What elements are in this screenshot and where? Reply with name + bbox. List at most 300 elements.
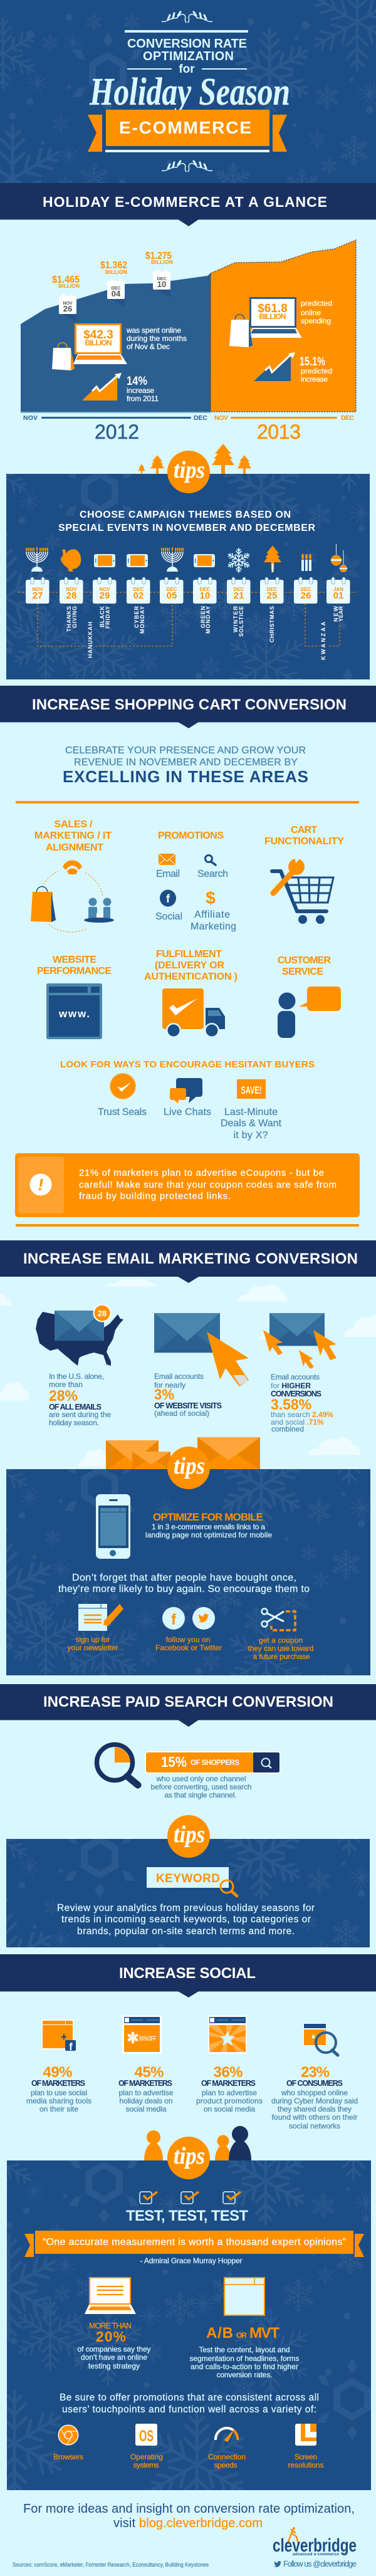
heading: choose campaign themes: SPECIAL EVENTS IN NOVEMBER AND DECEMBER — [58, 523, 315, 533]
stat: 49% of marketers — [26, 2019, 91, 2113]
icon: phone green monday — [194, 554, 215, 567]
stat: 36% of marketers: product promotions — [196, 2097, 263, 2105]
panel: keyword tip — [6, 1815, 370, 1947]
search bar: OF SHOPPERS — [191, 1759, 239, 1767]
text: predicted online spending: spending — [301, 317, 331, 325]
text: predicted online spending: predicted — [301, 299, 332, 308]
icon: phone cyber monday — [127, 554, 148, 567]
text: don't forget — [58, 1573, 310, 1594]
heading: MARKETING / IT — [34, 830, 112, 841]
heading: holiday e-commerce at a glance: HOLIDAY E-COMMERCE AT A GLANCE — [43, 194, 327, 210]
event labels: YEAR — [338, 605, 344, 622]
heading: increase social — [0, 1954, 376, 1997]
item: social follow: follow you on — [165, 1635, 211, 1644]
calendar: dec 10: DEC — [200, 587, 211, 592]
icon: turkey — [61, 549, 81, 572]
stat: 36% of marketers: OF MARKETERS — [201, 2079, 256, 2088]
icon: search — [206, 855, 216, 865]
stat: 15% of shoppers — [97, 1745, 280, 1799]
badge: tips: tips — [174, 457, 205, 483]
badge: tips: tips — [174, 2143, 205, 2169]
icon: delivery truck — [162, 988, 225, 1038]
area: 2012 — [21, 273, 211, 412]
heading: increase social: INCREASE SOCIAL — [119, 1965, 256, 1982]
text: optimize for mobile: 1 in 3 e-commerce emails links to a — [152, 1522, 265, 1531]
calendar: dec 26: 26 — [301, 590, 311, 601]
icon: page with magnifier — [303, 2023, 338, 2055]
label: affiliate marketing: Affiliate — [194, 909, 230, 920]
text: be sure to offer — [60, 2392, 319, 2415]
stat: 23% of consumers: they shared deals they — [278, 2105, 352, 2113]
peak day: dec 10: DEC — [157, 277, 166, 281]
item: newsletter — [68, 1604, 123, 1652]
text: was spent online: during the months — [127, 334, 187, 343]
title: CONVERSION RATE — [127, 37, 247, 51]
heading: ALIGNMENT — [46, 842, 103, 853]
stat: 15.1%: predicted — [301, 367, 332, 375]
heading: increase email marketing conversion: INCREASE EMAIL MARKETING CONVERSION — [23, 1250, 358, 1267]
panel: email tip — [6, 1447, 370, 1675]
stat: 15.1%: increase — [301, 375, 328, 384]
event labels: MONDAY — [139, 606, 145, 634]
search bar: 15% — [161, 1754, 187, 1770]
stat: 45% of marketers: plan to advertise — [119, 2088, 174, 2097]
calendar: dec 25 — [260, 577, 283, 604]
text: OF ALL EMAILS — [49, 1403, 102, 1411]
icon: alignment cycle — [31, 860, 114, 932]
item: connection speeds: speeds — [214, 2461, 237, 2469]
event labels: KWANZAA — [320, 622, 326, 660]
peak day: dec 04: BILLION — [105, 269, 127, 275]
text — [154, 1372, 222, 1418]
calendar: dec 05: 05 — [167, 590, 177, 601]
badge: tips — [167, 1447, 210, 1489]
item: a/b or mvt: segmentation of headlines, forms — [189, 2354, 300, 2363]
stat: 23% of consumers: who shopped online — [281, 2088, 348, 2097]
text: optimize for mobile: landing page not optimized for mobile — [145, 1531, 272, 1539]
item: live chats — [164, 1078, 211, 1118]
heading: increase paid search conversion: INCREASE PAID SEARCH CONVERSION — [43, 1694, 333, 1710]
text: In the U.S. alone, — [49, 1372, 104, 1381]
stat: 23% of consumers — [271, 2023, 358, 2130]
icon: holiday deal page: 50%OFF — [139, 2035, 156, 2043]
item: last-minute deals: Deals & Want — [221, 1118, 282, 1129]
stat: 49% of marketers: on their site — [39, 2105, 78, 2113]
area: fulfillment: (DELIVERY OR — [155, 960, 224, 971]
text: and social .71% — [271, 1418, 324, 1427]
panel: campaign themes tip — [6, 451, 370, 679]
icon: snowflake — [227, 548, 251, 572]
icon: growth arrow 2012 — [82, 373, 122, 401]
text — [49, 1372, 111, 1427]
icon: browser: www. — [58, 1008, 90, 1020]
text: as that single channel. — [164, 1791, 237, 1799]
icon: customer with speech bubble — [278, 987, 341, 1038]
icon: cart with wrench — [272, 856, 333, 924]
stat: 45% of marketers — [118, 2016, 174, 2113]
text: was spent online — [126, 326, 187, 351]
peak day: dec 04: $1.362 — [100, 260, 127, 271]
text: for HIGHER — [271, 1381, 311, 1390]
calendar: dec 05: DEC — [167, 587, 177, 592]
stat: 23% of consumers: OF CONSUMERS — [286, 2079, 343, 2088]
heading: choose campaign themes: CHOOSE CAMPAIGN THEMES BASED ON — [80, 510, 291, 520]
intro text: excelling in these areas: CELEBRATE YOUR PRESENCE AND GROW YOUR — [65, 745, 306, 756]
icon: growth arrow 2013 — [254, 352, 295, 381]
peak day: nov 26: BILLION — [58, 283, 80, 289]
event labels: CYBER — [133, 605, 140, 628]
item: connection speeds: Connection — [208, 2453, 246, 2461]
icon: checkboxes — [140, 2192, 241, 2204]
header panel — [0, 0, 376, 183]
badge: tips — [167, 451, 210, 493]
icon: bottom ornament — [162, 161, 212, 172]
item: 20% no testing strategy — [78, 2278, 150, 2370]
text: be sure to offer: users’ touchpoints and function well across a variety of: — [62, 2404, 316, 2415]
text: don't forget: Don’t forget that after people have bought once, — [72, 1573, 296, 1583]
heading: FUNCTIONALITY — [264, 836, 344, 847]
icon: envelope with cursors — [263, 1313, 337, 1369]
quote attribution: - Admiral Grace Murray Hopper — [140, 2256, 242, 2265]
callout: ecoupons warning: fraud by building protected links. — [79, 1191, 231, 1202]
area: customer service: CUSTOMER — [278, 955, 331, 966]
calendar: dec 02: DEC — [133, 587, 144, 592]
area: fulfillment — [144, 949, 238, 1038]
area: customer service — [278, 955, 341, 1038]
text: Email accounts — [154, 1372, 204, 1381]
event labels — [66, 605, 344, 660]
item: 20% no testing strategy: MORE THAN — [89, 2322, 132, 2330]
logo: cleverbridge — [273, 2527, 357, 2557]
area: promotions — [155, 830, 236, 932]
intro text: excelling in these areas: REVENUE IN NOVEMBER AND DECEMBER BY — [74, 757, 298, 768]
icon: envelope with cursor — [154, 1313, 249, 1386]
calendar: nov 29: 29 — [100, 590, 110, 601]
item: screen resolutions: resolutions — [288, 2461, 323, 2469]
stat: 28% of emails — [36, 1304, 123, 1427]
timeline: 2013: 2013 — [257, 421, 301, 443]
item: newsletter: your newsletter — [68, 1643, 118, 1652]
stat: 45% of marketers: holiday deals on — [119, 2097, 173, 2105]
stat: 36% of marketers: 36% — [213, 2064, 243, 2081]
text: optimize for mobile: OPTIMIZE FOR MOBILE — [153, 1511, 263, 1523]
area: fulfillment: FULFILLMENT — [156, 949, 222, 960]
stat: 23% of consumers: 23% — [301, 2064, 330, 2081]
calendar: jan 01 — [326, 577, 350, 604]
stat: 36% of marketers — [196, 2016, 263, 2113]
text: who used only one channel — [155, 1774, 246, 1783]
callout: ecoupons warning: careful! Make sure that your coupon codes are safe from — [79, 1180, 337, 1190]
item: a/b or mvt — [189, 2278, 300, 2379]
peak day: dec 04: 04 — [112, 289, 121, 298]
area: 2013 — [211, 240, 356, 412]
area: website performance: WEBSITE — [53, 955, 97, 965]
icon: trees — [138, 444, 251, 474]
stat: 23% of consumers: found with others on their — [272, 2113, 357, 2122]
icon: laptop 2013 — [248, 298, 302, 338]
heading: increase shopping cart conversion — [0, 686, 376, 728]
heading: look for ways: LOOK FOR WAYS TO ENCOURAGE HESITANT BUYERS — [60, 1059, 315, 1070]
icon: laptop 2012: $42.3 — [83, 328, 113, 342]
social: follow us: Follow us @cleverbridge — [283, 2560, 357, 2568]
area: sales marketing it alignment — [31, 819, 114, 932]
calendar: dec 10 — [193, 577, 217, 604]
item: a/b or mvt: and calls-to-action to find higher — [191, 2362, 298, 2371]
item: connection speeds — [208, 2428, 246, 2469]
footer call to action — [23, 2502, 355, 2530]
calendar: nov 27: 27 — [33, 590, 43, 601]
icon: orange envelopes — [106, 1437, 260, 1470]
icon: menorah — [26, 547, 48, 572]
area: promotions: PROMOTIONS — [158, 830, 224, 841]
callout: ecoupons warning: ! — [38, 1175, 44, 1194]
heading — [264, 825, 344, 847]
peak day: dec 10: $1.275 — [145, 251, 172, 261]
stat: 3% of website visits — [154, 1313, 249, 1418]
heading — [34, 819, 112, 853]
text: review analytics: trends in incoming search keywords, top categories or — [61, 1914, 311, 1925]
stat: 23% of consumers: social networks — [289, 2122, 340, 2130]
event labels: GIVING — [71, 606, 78, 628]
text: for nearly — [154, 1381, 185, 1390]
intro text: excelling in these areas — [63, 745, 308, 786]
icon: laptop 2012: BILLION — [85, 338, 112, 347]
logo: cleverbridge: advanced e-commerce — [293, 2552, 339, 2557]
title ribbon — [88, 110, 287, 152]
event labels: THANKS — [66, 606, 72, 632]
text: optimize for mobile — [145, 1511, 272, 1539]
calendar: dec 02: 02 — [133, 590, 144, 601]
keyword box: KEYWORD — [156, 1872, 220, 1885]
calendar: dec 21 — [227, 577, 251, 604]
icon: magnifier pie — [97, 1745, 138, 1785]
heading: increase shopping cart conversion: INCREASE SHOPPING CART CONVERSION — [32, 696, 347, 713]
heading: CART — [291, 825, 317, 835]
calendar: nov 27 — [26, 577, 49, 604]
text: CONVERSIONS — [271, 1390, 321, 1398]
item: operating systems: OS — [139, 2427, 154, 2445]
footer call to action: visit — [113, 2516, 135, 2530]
title ribbon: E-COMMERCE — [119, 118, 251, 137]
text: more than — [49, 1380, 83, 1389]
text: review analytics — [57, 1903, 315, 1937]
item: a/b or mvt: OR — [236, 2331, 247, 2340]
text: (ahead of social) — [154, 1409, 209, 1418]
item: social follow: Facebook or Twitter — [155, 1643, 222, 1652]
calendar: dec 10: 10 — [200, 590, 210, 601]
peak day: dec 10 — [145, 251, 173, 298]
stat: 49% of marketers: OF MARKETERS — [31, 2079, 85, 2088]
stat: 45% of marketers: OF MARKETERS — [118, 2079, 172, 2088]
icon: facebook — [160, 890, 176, 906]
area: fulfillment: AUTHENTICATION ) — [144, 971, 238, 982]
icon: smartphone — [96, 1494, 130, 1559]
icon: us map with envelope: 28 — [98, 1309, 107, 1318]
heading: increase paid search conversion — [0, 1684, 376, 1727]
callout: ecoupons warning — [15, 1153, 360, 1217]
timeline connector lines — [18, 592, 357, 646]
stat: 15.1%: 15.1% — [300, 355, 325, 369]
event labels: FRIDAY — [105, 606, 111, 629]
chart: holiday online spending — [21, 240, 356, 443]
event labels: BLACK — [99, 605, 105, 627]
calendar: dec 02 — [127, 577, 150, 604]
item: 20% no testing strategy: 20% — [96, 2328, 126, 2345]
icon: menorah — [161, 547, 184, 572]
stat: 3.58% higher conversions — [263, 1313, 337, 1433]
item: a/b or mvt: A/B — [206, 2325, 233, 2342]
item: a/b or mvt: Test the content, layout and — [199, 2345, 290, 2354]
stat: 15.1% — [300, 355, 332, 384]
item: coupon: a future purchase — [253, 1652, 310, 1661]
item: live chats: Live Chats — [164, 1107, 211, 1118]
badge: tips: tips — [174, 1453, 205, 1479]
heading: choose campaign themes — [58, 510, 315, 533]
icon: laptop 2012 — [73, 325, 127, 364]
title: Holiday Season — [89, 71, 290, 113]
label: affiliate marketing: Marketing — [191, 921, 236, 932]
text: combined — [271, 1425, 304, 1433]
footer call to action: blog.cleverbridge.com — [139, 2516, 263, 2530]
icon: holiday deal page — [122, 2016, 162, 2054]
stat: 45% of marketers: social media — [125, 2105, 167, 2113]
peak day: nov 26: NOV — [63, 301, 73, 306]
heading: holiday e-commerce at a glance — [0, 183, 376, 226]
text: review analytics: brands, popular on-site search terms and more. — [77, 1926, 295, 1937]
item: browsers: Browsers — [53, 2453, 83, 2461]
icon: kwanzaa candles — [301, 554, 311, 571]
text: predicted online spending: online — [301, 308, 321, 317]
keyword box — [147, 1867, 237, 1896]
item: last-minute deals: Last-Minute — [224, 1107, 278, 1118]
stat: 36% of marketers: plan to advertise — [202, 2088, 257, 2097]
area: website performance — [37, 955, 112, 1039]
stat: 14% — [127, 375, 159, 403]
timeline: 2012: 2012 — [95, 421, 139, 443]
event labels: HANUKKAH — [87, 622, 93, 658]
stat: 36% of marketers: on social media — [204, 2105, 255, 2113]
event labels: NEW — [333, 605, 339, 622]
item: operating systems — [130, 2424, 163, 2469]
stat: 14%: from 2011 — [127, 394, 159, 403]
item: browsers — [53, 2424, 83, 2461]
item: screen resolutions — [288, 2424, 323, 2469]
peak day: nov 26: $1.465 — [52, 275, 80, 285]
text: 3.58% — [271, 1396, 311, 1413]
item: 20% no testing strategy: don’t have an online — [81, 2353, 147, 2362]
item: social follow — [155, 1607, 222, 1652]
item: 20% no testing strategy: testing strategy — [88, 2362, 140, 2370]
stat: 23% of consumers: during Cyber Monday said — [271, 2097, 358, 2105]
text: was spent online: was spent online — [126, 326, 181, 335]
quote ribbon — [24, 2231, 364, 2257]
heading: SALES / — [54, 819, 93, 830]
calendar: jan 01: JAN — [333, 587, 343, 592]
stat: 49% of marketers: media sharing tools — [26, 2097, 91, 2105]
title: for — [179, 63, 195, 76]
item: social follow: f — [171, 1611, 177, 1628]
calendar: dec 25: 25 — [267, 590, 277, 601]
clouds — [0, 1279, 376, 1467]
callout: ecoupons warning: 21% of marketers plan to advertise eCoupons - but be — [79, 1168, 324, 1178]
item: trust seals: Trust Seals — [98, 1107, 147, 1118]
area: website performance: PERFORMANCE — [37, 966, 112, 976]
text: Email accounts — [271, 1373, 320, 1381]
event labels: SOLSTICE — [238, 606, 244, 637]
label: search: Search — [197, 869, 228, 879]
text — [271, 1373, 333, 1433]
item: coupon: they can use toward — [248, 1644, 313, 1653]
panel: test tip — [7, 2137, 371, 2490]
text: 28% — [49, 1388, 78, 1405]
peak day: nov 26: 26 — [63, 304, 72, 313]
event labels: WINTER — [232, 605, 239, 632]
item: a/b or mvt: conversion rates. — [217, 2370, 272, 2379]
calendar: nov 28 — [60, 577, 83, 604]
title: OPTIMIZATION — [143, 50, 234, 63]
icon: us map with envelope — [36, 1304, 123, 1366]
icon: christmas tree — [264, 546, 281, 572]
label: social: Social — [155, 911, 182, 922]
item: 20% no testing strategy: of companies say they — [78, 2345, 150, 2353]
text: are sent during the — [49, 1410, 111, 1419]
icon: share page — [41, 2019, 76, 2053]
icon: laptop 2013: $61.8 — [258, 302, 288, 315]
text — [150, 1774, 252, 1799]
icon: laptop 2013: BILLION — [259, 312, 286, 321]
calendar: dec 21: 21 — [234, 590, 244, 601]
label: affiliate marketing — [191, 909, 236, 932]
calendar: dec 21: DEC — [234, 587, 244, 592]
item: screen resolutions: Screen — [295, 2453, 317, 2461]
icon: email — [159, 854, 175, 865]
stat: 49% of marketers: 49% — [43, 2064, 73, 2081]
icon: dollar: $ — [206, 888, 216, 908]
text: don't forget: they’re more likely to buy again. So encourage them to — [58, 1584, 310, 1594]
quote ribbon: “One accurate measurement is worth a thousand expert opinions” — [43, 2237, 346, 2248]
title — [89, 30, 290, 113]
icon: shopping bag 2013 — [229, 315, 253, 347]
icon: facebook: f — [166, 893, 170, 905]
item: operating systems: Operating — [130, 2453, 163, 2461]
timeline: 2012: DEC — [194, 414, 207, 422]
icon: star promotion page — [208, 2016, 247, 2054]
stat: 49% of marketers: plan to use social — [31, 2088, 87, 2097]
item: a/b or mvt: MVT — [249, 2325, 279, 2342]
calendar: dec 26 — [294, 577, 317, 604]
timeline: 2013 — [214, 414, 354, 443]
event labels: GREEN — [200, 606, 206, 628]
peak day: dec 10: 10 — [157, 280, 166, 289]
text: predicted online spending — [301, 299, 332, 325]
stat: 14%: increase — [127, 386, 154, 395]
icon: people — [144, 2126, 251, 2160]
calendar: dec 05 — [160, 577, 183, 604]
sources: Sources: comScore, eMarketer, Forrester Research, Econsultancy, Building Keystones — [13, 2562, 209, 2568]
item: newsletter: sign up for — [75, 1635, 110, 1644]
item: last-minute deals: it by X? — [233, 1130, 268, 1141]
item: coupon: get a coupon — [259, 1636, 303, 1645]
timeline: 2013: DEC — [341, 414, 354, 422]
icon: ornaments — [331, 544, 347, 572]
peak day: dec 04: DEC — [112, 286, 120, 291]
peak day: dec 04 — [100, 260, 127, 307]
peak day: nov 26 — [52, 275, 80, 322]
area: customer service: SERVICE — [282, 966, 323, 977]
calendar: nov 28: NOV — [66, 587, 77, 592]
stat: 45% of marketers: 45% — [134, 2064, 164, 2081]
text: review analytics: Review your analytics from previous holiday seasons for — [57, 1903, 315, 1914]
